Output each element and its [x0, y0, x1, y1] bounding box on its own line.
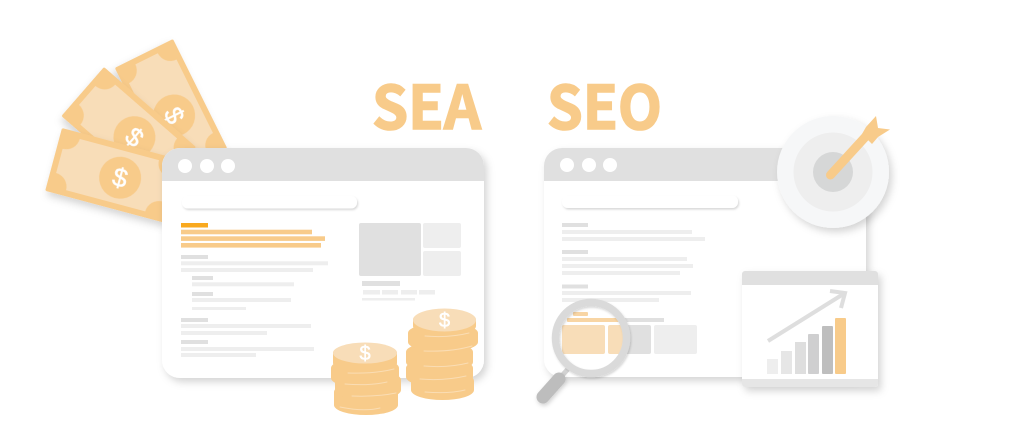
paid ad result: [181, 223, 325, 248]
organic results list: [562, 223, 705, 322]
product image gallery: [359, 223, 461, 276]
window control dots: [560, 158, 617, 172]
browser title bar: [162, 148, 484, 181]
magnifier lens: [559, 306, 623, 370]
search bar: [562, 196, 738, 208]
icon: middle bill: $: [119, 121, 150, 154]
icon: right coin stack: [406, 308, 478, 400]
icon: fan of dollar bills: [45, 39, 227, 229]
bar chart: [767, 318, 846, 374]
card footer: [742, 379, 878, 387]
icon: front bill: [45, 128, 165, 229]
growth arrow: [768, 291, 845, 341]
organic results list: [181, 255, 328, 357]
magnifier neck: [558, 369, 568, 380]
icon: front bill: $: [109, 161, 131, 194]
icon: left coin stack: [331, 342, 401, 415]
icon: middle bill: [60, 68, 196, 156]
card header: [742, 271, 878, 285]
icon: back bill: [112, 39, 227, 148]
panel: SEO browser window: [544, 148, 866, 377]
icon: magnifying glass: [543, 302, 651, 397]
magnifier ring: [556, 302, 626, 374]
coin dollar sign: $: [359, 343, 371, 365]
panel: SEA browser window: [162, 148, 484, 378]
coin dollar sign: $: [439, 310, 450, 332]
panel: growth chart card: [742, 271, 878, 387]
browser title bar: [544, 148, 866, 181]
arrow shaft: [830, 134, 868, 175]
gallery caption: [362, 281, 435, 300]
magnifier handle: [543, 379, 559, 397]
icon: back bill: $: [157, 102, 191, 129]
heading: SEO: SEO: [547, 60, 662, 147]
coin top face: [413, 308, 476, 332]
coin top face: [333, 342, 397, 364]
search bar: [182, 196, 357, 208]
icon: target with arrow: [777, 116, 890, 228]
window control dots: [178, 159, 235, 173]
image thumbnails: [562, 325, 697, 354]
heading: SEA: SEA: [372, 60, 482, 147]
arrow fletching: [862, 116, 890, 144]
